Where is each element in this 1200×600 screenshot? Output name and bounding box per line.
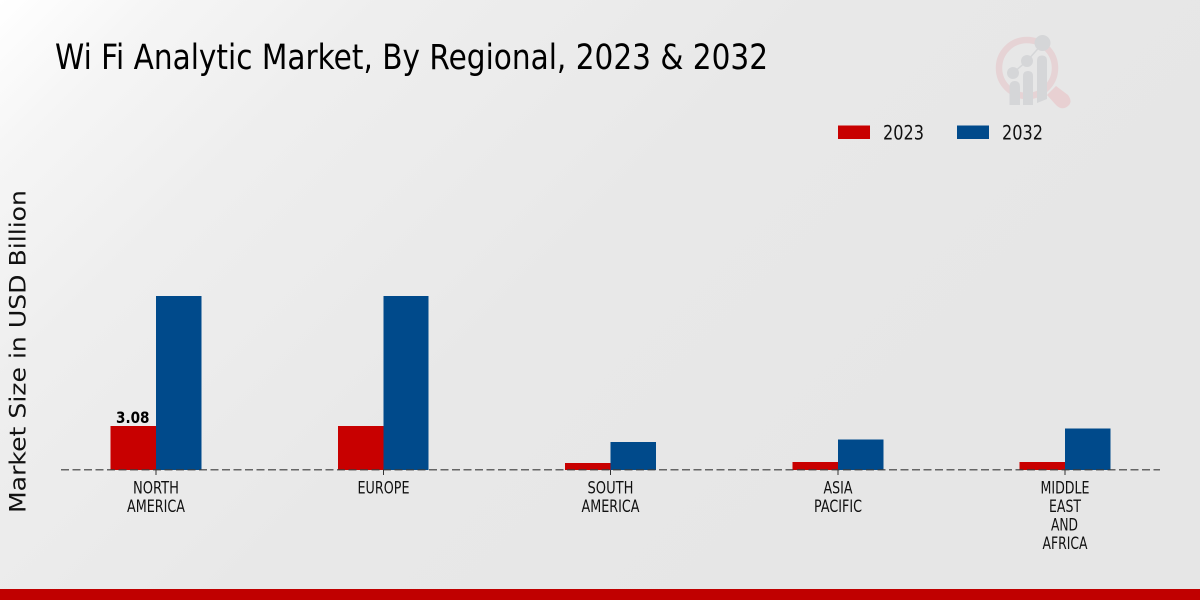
bar chart bbox=[110, 296, 1110, 470]
x axis labels: AND bbox=[1051, 516, 1078, 534]
x axis labels: NORTH bbox=[133, 478, 179, 498]
legend: 2032: 2032 bbox=[1002, 122, 1043, 144]
group: North America: 3.08 bbox=[116, 408, 150, 427]
group: South America bbox=[565, 442, 656, 470]
group: Europe bbox=[338, 296, 428, 470]
x axis labels: SOUTH bbox=[588, 478, 634, 498]
x axis labels: AMERICA bbox=[127, 497, 186, 516]
group: Asia Pacific bbox=[792, 440, 884, 470]
title: Wi Fi Analytic Market, By Regional, 2023 & 2032 bbox=[55, 38, 768, 78]
legend: 2023 bbox=[838, 122, 924, 144]
x axis labels: AFRICA bbox=[1042, 534, 1088, 553]
legend: 2023: 2023 bbox=[883, 122, 924, 144]
x axis labels: PACIFIC bbox=[814, 497, 862, 516]
x axis labels: EUROPE bbox=[358, 478, 410, 498]
y axis title: Market Size in USD Billion bbox=[6, 190, 32, 513]
group: North America bbox=[110, 296, 202, 470]
x axis labels: AMERICA bbox=[582, 497, 640, 516]
x axis baseline bbox=[61, 469, 1160, 471]
legend bbox=[838, 122, 1043, 144]
legend: 2032 bbox=[957, 122, 1043, 144]
x axis labels: MIDDLE bbox=[1040, 478, 1090, 498]
group: Middle East and Africa bbox=[1020, 428, 1110, 470]
x axis labels: EAST bbox=[1049, 497, 1082, 516]
footer bar bbox=[0, 589, 1200, 600]
x axis labels: ASIA bbox=[824, 478, 853, 498]
x axis labels bbox=[127, 478, 1090, 553]
icon: magnifier logo watermark bbox=[999, 35, 1070, 108]
